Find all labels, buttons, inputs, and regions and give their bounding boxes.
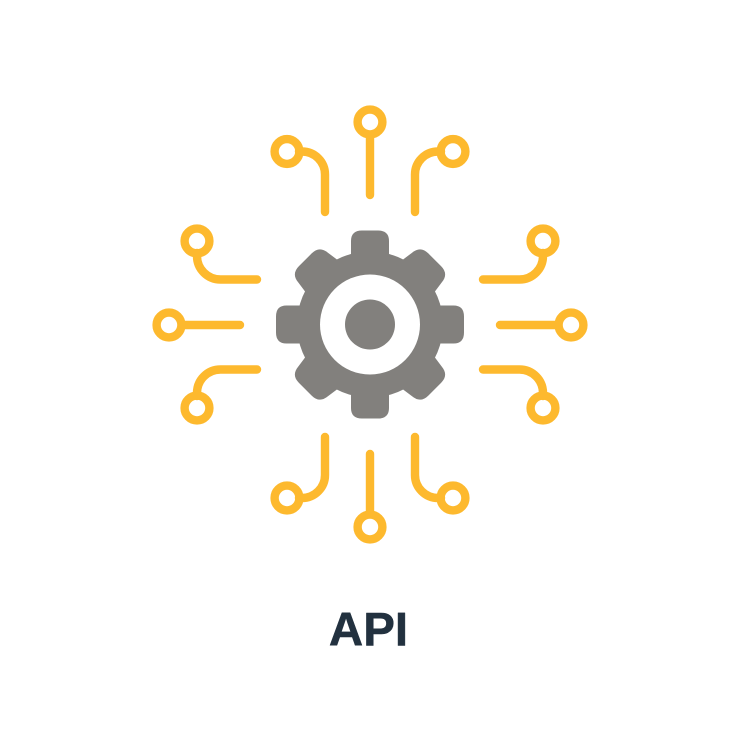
connector: bottom left <box>275 437 325 510</box>
connector: right upper <box>483 229 555 280</box>
connector: right lower <box>483 370 555 420</box>
title: API <box>329 604 408 656</box>
connector: bottom right <box>415 437 465 510</box>
connector: right middle <box>500 313 583 337</box>
connector: left lower <box>185 370 257 420</box>
connector: top left <box>275 139 325 212</box>
circuit lines <box>157 110 583 539</box>
connector: left upper <box>185 229 257 280</box>
connector: top <box>358 110 382 195</box>
connector: bottom <box>358 454 382 539</box>
connector: left middle <box>157 313 240 337</box>
connector: top right <box>415 139 465 212</box>
icon: gear <box>276 230 464 418</box>
